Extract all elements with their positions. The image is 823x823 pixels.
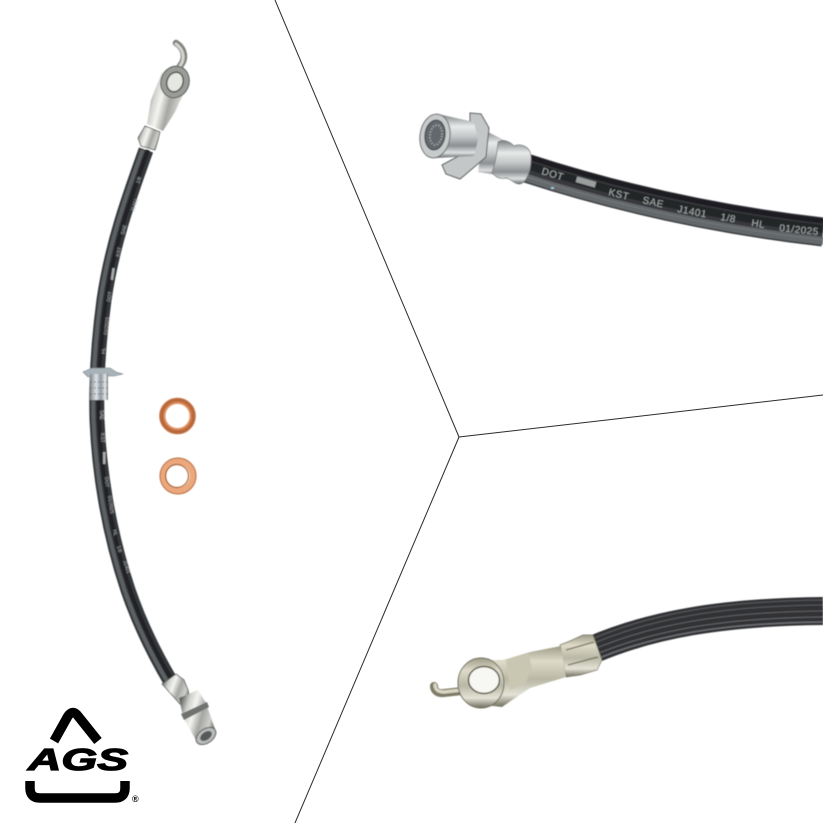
detail hose print: J1401 bbox=[676, 204, 708, 221]
hose print marks, upper: HL bbox=[101, 347, 107, 354]
top banjo fitting bbox=[138, 43, 194, 150]
hose print marks, lower: KST bbox=[99, 433, 105, 443]
detail neck bbox=[478, 130, 504, 176]
registered mark: ® bbox=[132, 794, 139, 804]
detail crimp collar bbox=[492, 141, 531, 184]
mounting clamp bbox=[83, 368, 123, 400]
detail threaded bore bbox=[423, 119, 447, 151]
hook bbox=[176, 43, 184, 66]
copper washers bbox=[160, 398, 196, 494]
bore bbox=[198, 729, 214, 743]
detail hose print: 01/2025 bbox=[779, 223, 819, 238]
detail hose bbox=[524, 157, 823, 241]
washer bottom bbox=[160, 458, 196, 494]
banjo hook bbox=[434, 686, 462, 693]
detail hose print: SAE bbox=[641, 195, 665, 211]
hose print marks, lower: HL bbox=[111, 529, 118, 537]
hose print marks, lower: SAE bbox=[98, 410, 104, 421]
full brake hose assembly bbox=[83, 43, 219, 748]
eye hole bbox=[164, 70, 186, 94]
flat facet bbox=[506, 653, 532, 690]
eye ring bbox=[156, 62, 194, 102]
detail: threaded end closeup bbox=[417, 112, 823, 241]
hose print marks, upper: 01/2025 bbox=[103, 316, 111, 335]
hose print marks, upper: SAE bbox=[120, 224, 129, 236]
hose print marks, lower: 1/8 bbox=[115, 545, 123, 553]
banjo eye ring bbox=[458, 658, 504, 708]
fitting barrel bbox=[179, 690, 216, 742]
logo wordmark: AGS bbox=[27, 742, 128, 777]
banjo crimp collar bbox=[560, 635, 602, 677]
banjo fitting body bbox=[476, 646, 566, 707]
hose print marks, lower: J1401 bbox=[121, 560, 131, 575]
detail hose print: HL bbox=[751, 218, 766, 231]
banjo eye hole bbox=[468, 666, 500, 694]
hose print marks, upper: 1/8 bbox=[135, 176, 143, 185]
hose print marks, upper: KST bbox=[115, 247, 123, 257]
flange bbox=[181, 702, 209, 720]
hose print marks, upper bbox=[101, 176, 143, 354]
hose print marks, lower: 01/2025 bbox=[106, 495, 115, 514]
detail hose print: DOT bbox=[540, 166, 565, 183]
crimp collar bbox=[162, 674, 190, 704]
bottom threaded fitting bbox=[162, 674, 219, 748]
detail hose print bbox=[540, 166, 819, 238]
hose print marks, upper: J1401 bbox=[130, 198, 140, 213]
end face bbox=[193, 724, 219, 748]
logo base bracket bbox=[30, 781, 125, 798]
detail hose print: KST bbox=[607, 187, 630, 203]
detail: banjo end closeup bbox=[434, 600, 823, 708]
hose print marks, lower: DOT bbox=[103, 477, 110, 488]
detail barrel bbox=[436, 114, 478, 158]
detail hose print: 1/8 bbox=[719, 212, 737, 226]
banjo hose bbox=[592, 600, 823, 661]
logo chevron bbox=[54, 712, 98, 741]
detail flange bbox=[442, 113, 489, 179]
detail barrel end face bbox=[417, 112, 453, 160]
crimp collar bbox=[138, 126, 160, 150]
AGS logo bbox=[27, 712, 139, 804]
hose print marks, upper: DOT bbox=[106, 291, 114, 302]
washer top bbox=[160, 398, 196, 434]
divider lines bbox=[275, 0, 823, 823]
hose print marks, lower bbox=[98, 410, 131, 575]
fitting body bbox=[147, 72, 184, 131]
hose body bbox=[93, 150, 173, 682]
